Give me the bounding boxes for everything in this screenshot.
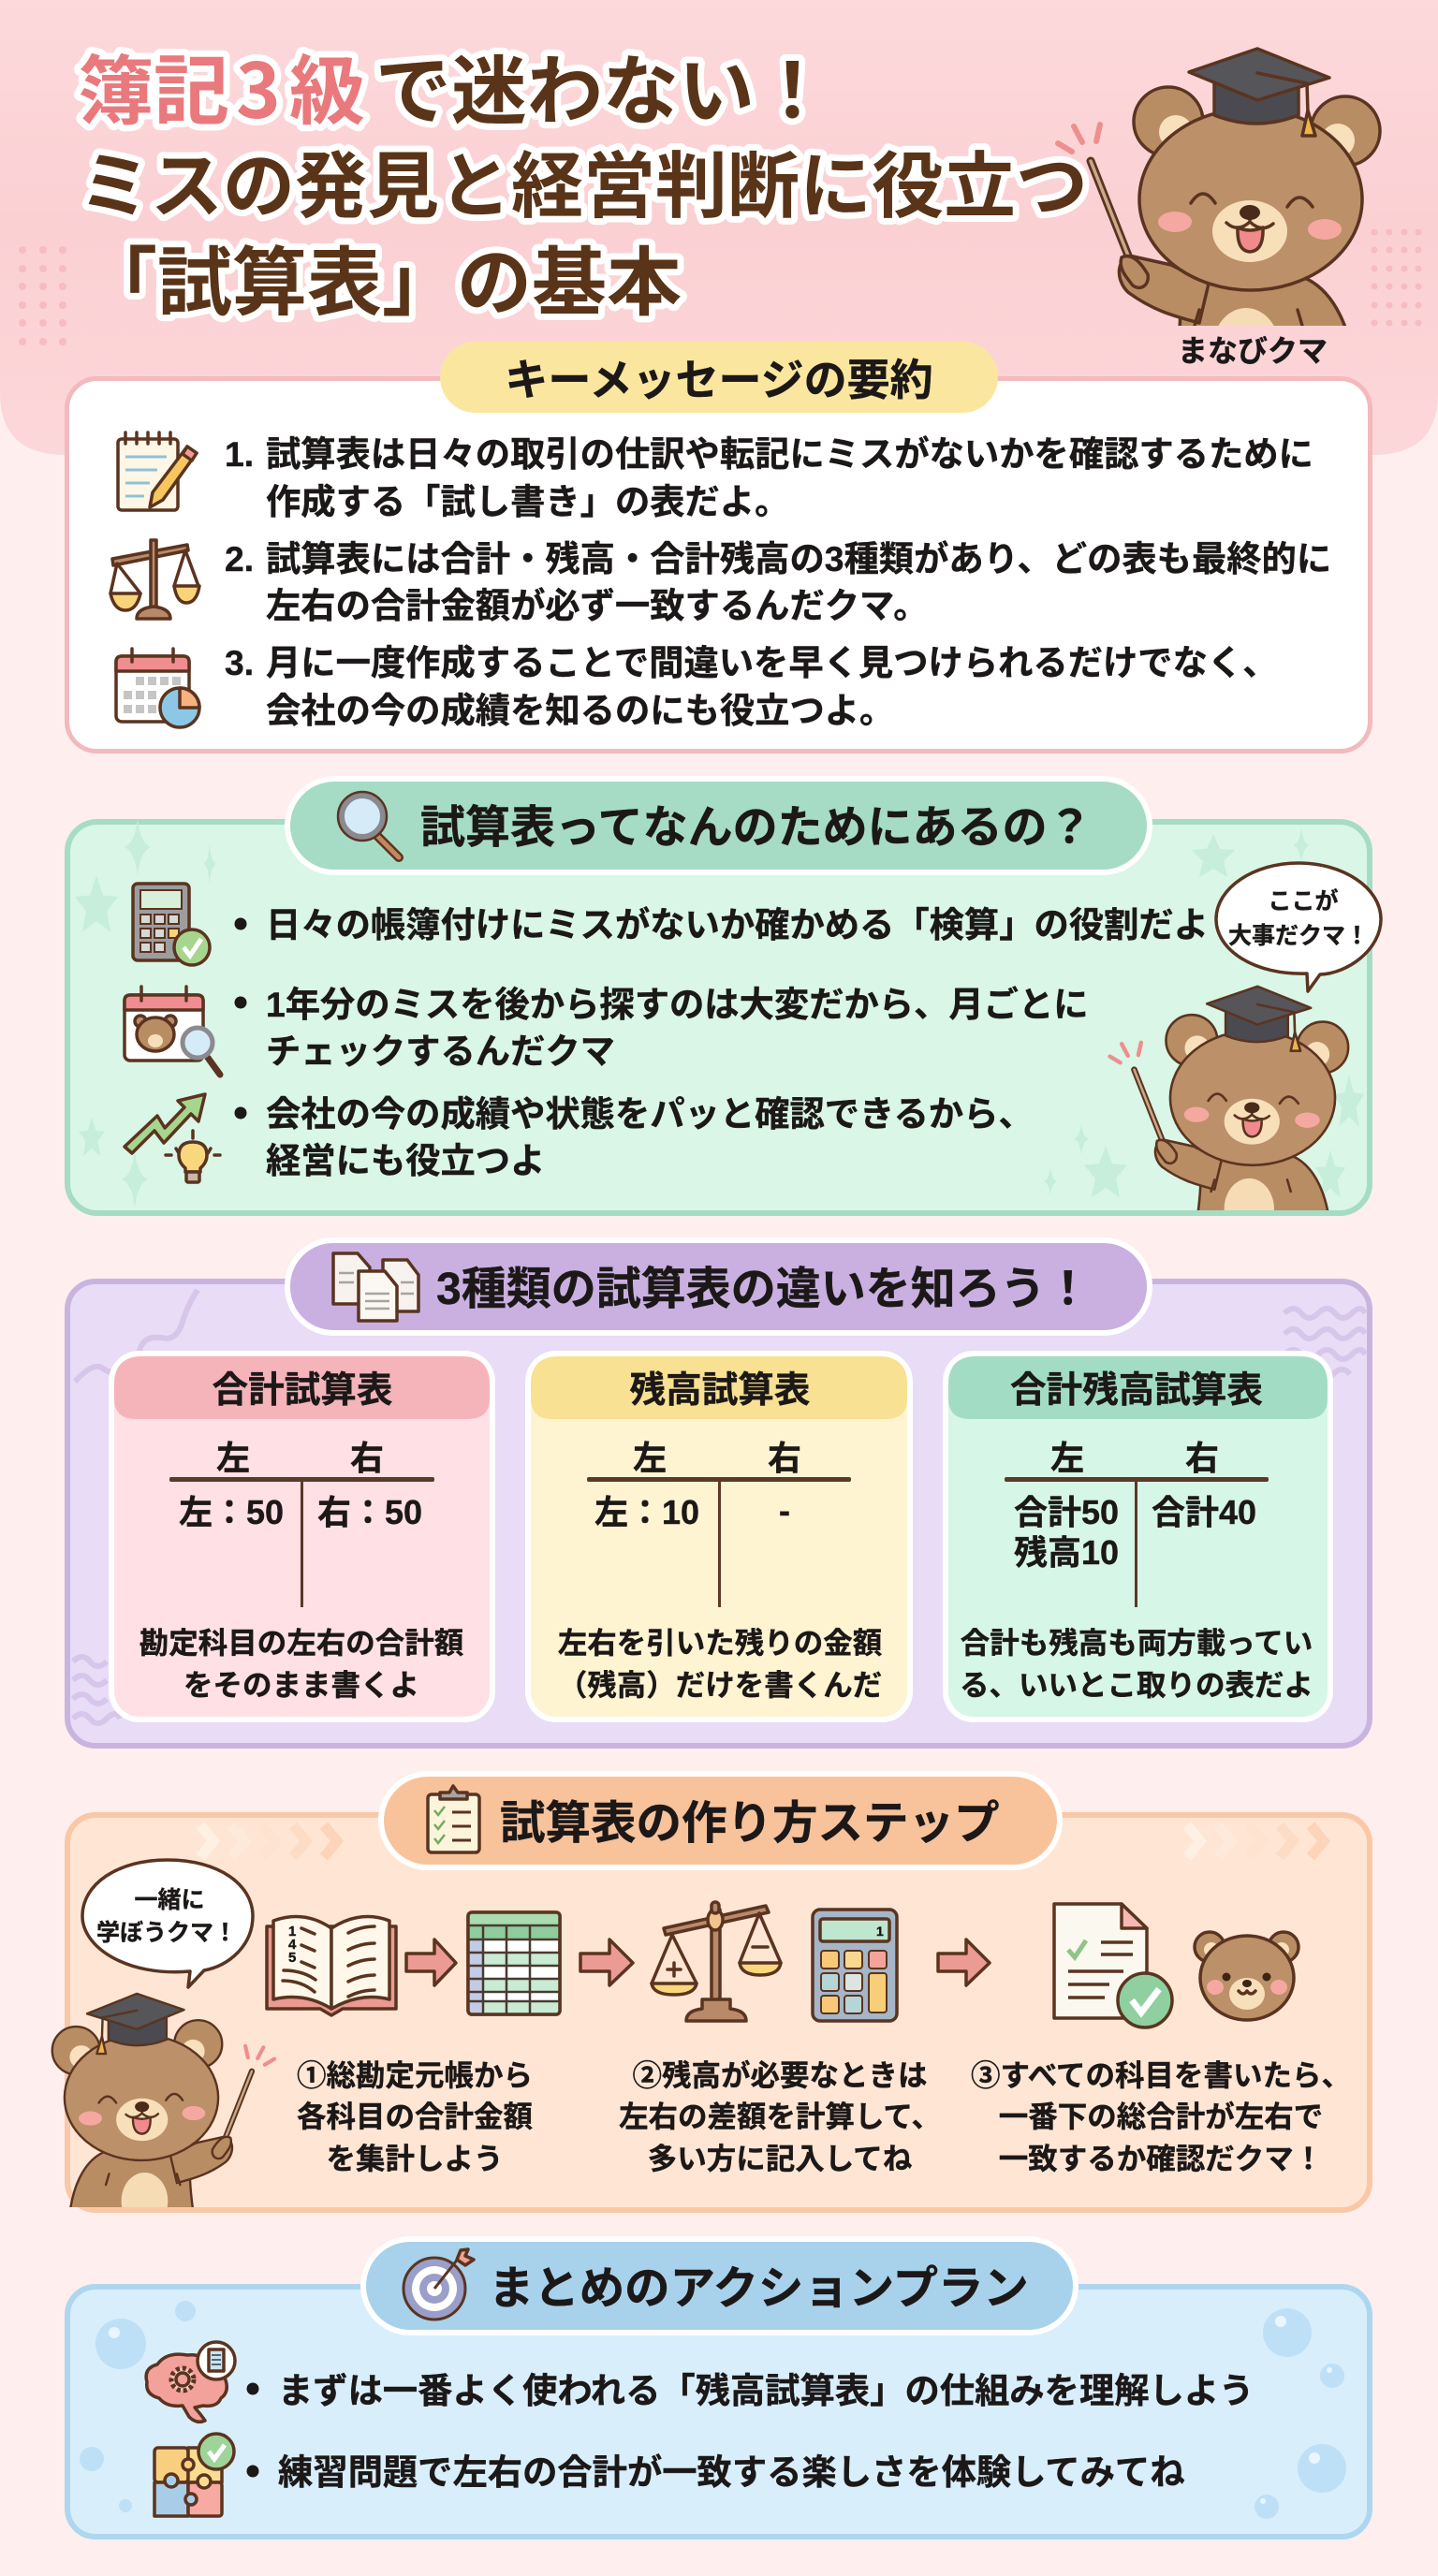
- T-account diagram: 左：10: [594, 1493, 699, 1531]
- card: balance trial balance: （残高）だけを書くんだ: [558, 1668, 882, 1702]
- card: combined trial balance: [946, 1354, 1330, 1720]
- mascot: bear in orange panel: [52, 1994, 274, 2230]
- heading pill: action plan: まとめのアクションプラン: [489, 2263, 1029, 2314]
- card: total trial balance: をそのまま書くよ: [183, 1668, 419, 1702]
- title: 簿記3級で迷わない！: [78, 31, 830, 140]
- text: message 1: [225, 434, 1313, 521]
- icon: calendar with pie chart: [116, 649, 199, 727]
- bullet text: understand balance table: まずは一番よく使われる「残高試算表」の仕組みを理解しよう: [278, 2371, 1254, 2410]
- decorative stars: [75, 819, 1364, 1208]
- heading pill: three types: [287, 1240, 1150, 1333]
- panel: how to make steps: [52, 1774, 1370, 2230]
- card: total trial balance: [111, 1354, 492, 1720]
- panel: purpose of trial balance: [67, 779, 1381, 1239]
- T-account diagram: 右: [768, 1439, 801, 1477]
- text: message 2: 2.: [225, 539, 254, 578]
- icon: target with arrow: [404, 2249, 474, 2320]
- icon: open ledger book: 4: [288, 1937, 297, 1953]
- text: step 2: [619, 2058, 941, 2175]
- card: total trial balance: 合計試算表: [213, 1370, 392, 1411]
- T-account diagram: 右: [350, 1439, 384, 1477]
- decorative bubbles: [80, 2301, 1346, 2519]
- text: step 1: 各科目の合計金額: [297, 2100, 533, 2133]
- speech bubble: this is important: ここが: [1268, 887, 1339, 915]
- text: step 2: 左右の差額を計算して、: [619, 2100, 941, 2133]
- T-account diagram: 合計40: [1152, 1493, 1256, 1531]
- card: balance trial balance: [528, 1354, 910, 1720]
- panel: action plan: [67, 2239, 1370, 2537]
- speech bubble: this is important: [1216, 863, 1381, 991]
- title: 「試算表」の基本: [82, 242, 682, 325]
- icon: calculator with check: [133, 884, 210, 965]
- text: message 3: 会社の今の成績を知るのにも役立つよ。: [266, 691, 894, 730]
- heading pill: purpose: 試算表ってなんのためにあるの？: [420, 803, 1093, 853]
- icon: open ledger book: [267, 1917, 396, 2015]
- arrow: table to scale: [580, 1939, 633, 1985]
- card: total trial balance: 勘定科目の左右の合計額: [139, 1626, 464, 1660]
- title: ミスの発見と経営判断に役立つ: [79, 147, 1088, 227]
- T-account diagram: [169, 1439, 434, 1607]
- bullet text: monthly check: チェックするんだクマ: [266, 1032, 615, 1071]
- icon: brain with gear and document: [146, 2342, 235, 2422]
- heading pill: key message: キーメッセージの要約: [505, 356, 933, 404]
- text: step 2: ②残高が必要なときは: [632, 2058, 928, 2092]
- speech bubble: learn together: 学ぼうクマ！: [96, 1920, 237, 1946]
- panel: key message summary: [67, 342, 1371, 751]
- T-account diagram: 残高10: [1014, 1533, 1119, 1572]
- speech bubble: learn together: 一緒に: [134, 1887, 205, 1913]
- speech bubble: learn together: [82, 1860, 253, 1987]
- icon: rising arrow and light bulb: [125, 1094, 220, 1182]
- icon: calculator: 1: [876, 1924, 884, 1939]
- icon: calculator: [813, 1910, 897, 2021]
- icon: spreadsheet table: [468, 1912, 560, 2014]
- icon: clipboard checklist: [428, 1786, 479, 1852]
- mascot: bear in green panel: [1110, 987, 1348, 1239]
- icon: notepad and pencil: [118, 432, 197, 510]
- text: message 1: 作成する「試し書き」の表だよ。: [266, 482, 789, 521]
- text: step 3: 一致するか確認だクマ！: [999, 2142, 1323, 2175]
- card: combined trial balance: 合計も残高も両方載ってい: [961, 1626, 1313, 1660]
- heading pill: purpose: [287, 779, 1150, 872]
- T-account diagram: 合計50: [1014, 1493, 1119, 1531]
- text: message 1: 試算表は日々の取引の仕訳や転記にミスがないかを確認するために: [266, 434, 1313, 474]
- text: message 2: [225, 539, 1331, 625]
- heading pill: steps: [381, 1774, 1060, 1867]
- bullet text: management use: 経営にも役立つよ: [266, 1141, 545, 1180]
- icon: stacked documents: [333, 1253, 418, 1321]
- icon: bear face: [1195, 1932, 1299, 2020]
- bullet text: management use: 会社の今の成績や状態をパッと確認できるから、: [266, 1094, 1034, 1134]
- header background shape: [0, 0, 1438, 455]
- decorative dot grids: [19, 228, 1421, 345]
- mascot: teacher bear with pointer: [1055, 47, 1382, 326]
- text: message 1: 1.: [225, 434, 254, 474]
- text: message 3: 月に一度作成することで間違いを早く見つけられるだけでなく、: [266, 643, 1277, 682]
- text: step 1: [297, 2058, 533, 2175]
- heading pill: three types: 3種類の試算表の違いを知ろう！: [436, 1265, 1091, 1314]
- icon: magnifying glass: [338, 792, 399, 857]
- text: step 3: ③すべての科目を書いたら、: [971, 2058, 1351, 2092]
- bullet text: monthly check: [234, 985, 1089, 1071]
- decorative chevrons: [200, 1825, 1324, 1857]
- text: message 3: 3.: [225, 643, 254, 682]
- decorative squiggles: [73, 1290, 1365, 1723]
- text: step 3: [971, 2058, 1351, 2175]
- speech bubble: this is important: 大事だクマ！: [1228, 923, 1369, 949]
- bullet text: monthly check: 1年分のミスを後から探すのは大変だから、月ごとに: [266, 985, 1089, 1024]
- panel: three types: [67, 1240, 1370, 1746]
- text: step 1: ①総勘定元帳から: [297, 2058, 533, 2092]
- heading pill: key message: [440, 342, 998, 413]
- T-account diagram: 右：50: [317, 1493, 422, 1531]
- text: step 2: 多い方に記入してね: [648, 2142, 913, 2175]
- icon: open ledger book: 5: [288, 1950, 296, 1966]
- card: combined trial balance: 合計残高試算表: [1010, 1370, 1263, 1411]
- bullet text: verification role: 日々の帳簿付けにミスがないか確かめる「検算」の役割だよ: [266, 905, 1209, 944]
- T-account diagram: 右: [1185, 1439, 1219, 1477]
- text: message 3: [225, 643, 1277, 730]
- T-account diagram: 左: [1050, 1439, 1084, 1477]
- mascot name: まなびクマ: [1178, 334, 1328, 368]
- card: balance trial balance: 残高試算表: [630, 1370, 810, 1411]
- text: step 3: 一番下の総合計が左右で: [999, 2100, 1323, 2133]
- T-account diagram: -: [779, 1491, 790, 1530]
- bullet text: management use: [234, 1094, 1034, 1180]
- text: message 2: 左右の合計金額が必ず一致するんだクマ。: [266, 586, 929, 625]
- T-account diagram: [1005, 1439, 1269, 1607]
- title: [78, 31, 1088, 325]
- text: message 2: 試算表には合計・残高・合計残高の3種類があり、どの表も最終的に: [266, 539, 1331, 578]
- arrow: step 1 to table: [406, 1939, 456, 1985]
- arrow: to final check: [938, 1939, 990, 1985]
- T-account diagram: 左: [633, 1439, 667, 1477]
- icon: open ledger book: 1: [288, 1924, 296, 1939]
- T-account diagram: 左: [216, 1439, 250, 1477]
- icon: checked document: [1054, 1904, 1172, 2027]
- icon: balance scale with plus and minus: [652, 1902, 781, 2021]
- T-account diagram: 左：50: [179, 1493, 284, 1531]
- icon: calendar with bear and magnifier: [125, 987, 220, 1075]
- bullet text: practice problems: 練習問題で左右の合計が一致する楽しさを体験してみてね: [278, 2452, 1185, 2492]
- heading pill: action plan: [363, 2239, 1076, 2333]
- card: balance trial balance: 左右を引いた残りの金額: [558, 1626, 883, 1660]
- heading pill: steps: 試算表の作り方ステップ: [500, 1798, 1000, 1849]
- card: combined trial balance: る、いいとこ取りの表だよ: [960, 1668, 1313, 1702]
- text: step 1: を集計しよう: [326, 2142, 504, 2175]
- icon: puzzle with check: [154, 2434, 234, 2516]
- icon: balance scale: [110, 540, 199, 619]
- T-account diagram: [587, 1439, 851, 1607]
